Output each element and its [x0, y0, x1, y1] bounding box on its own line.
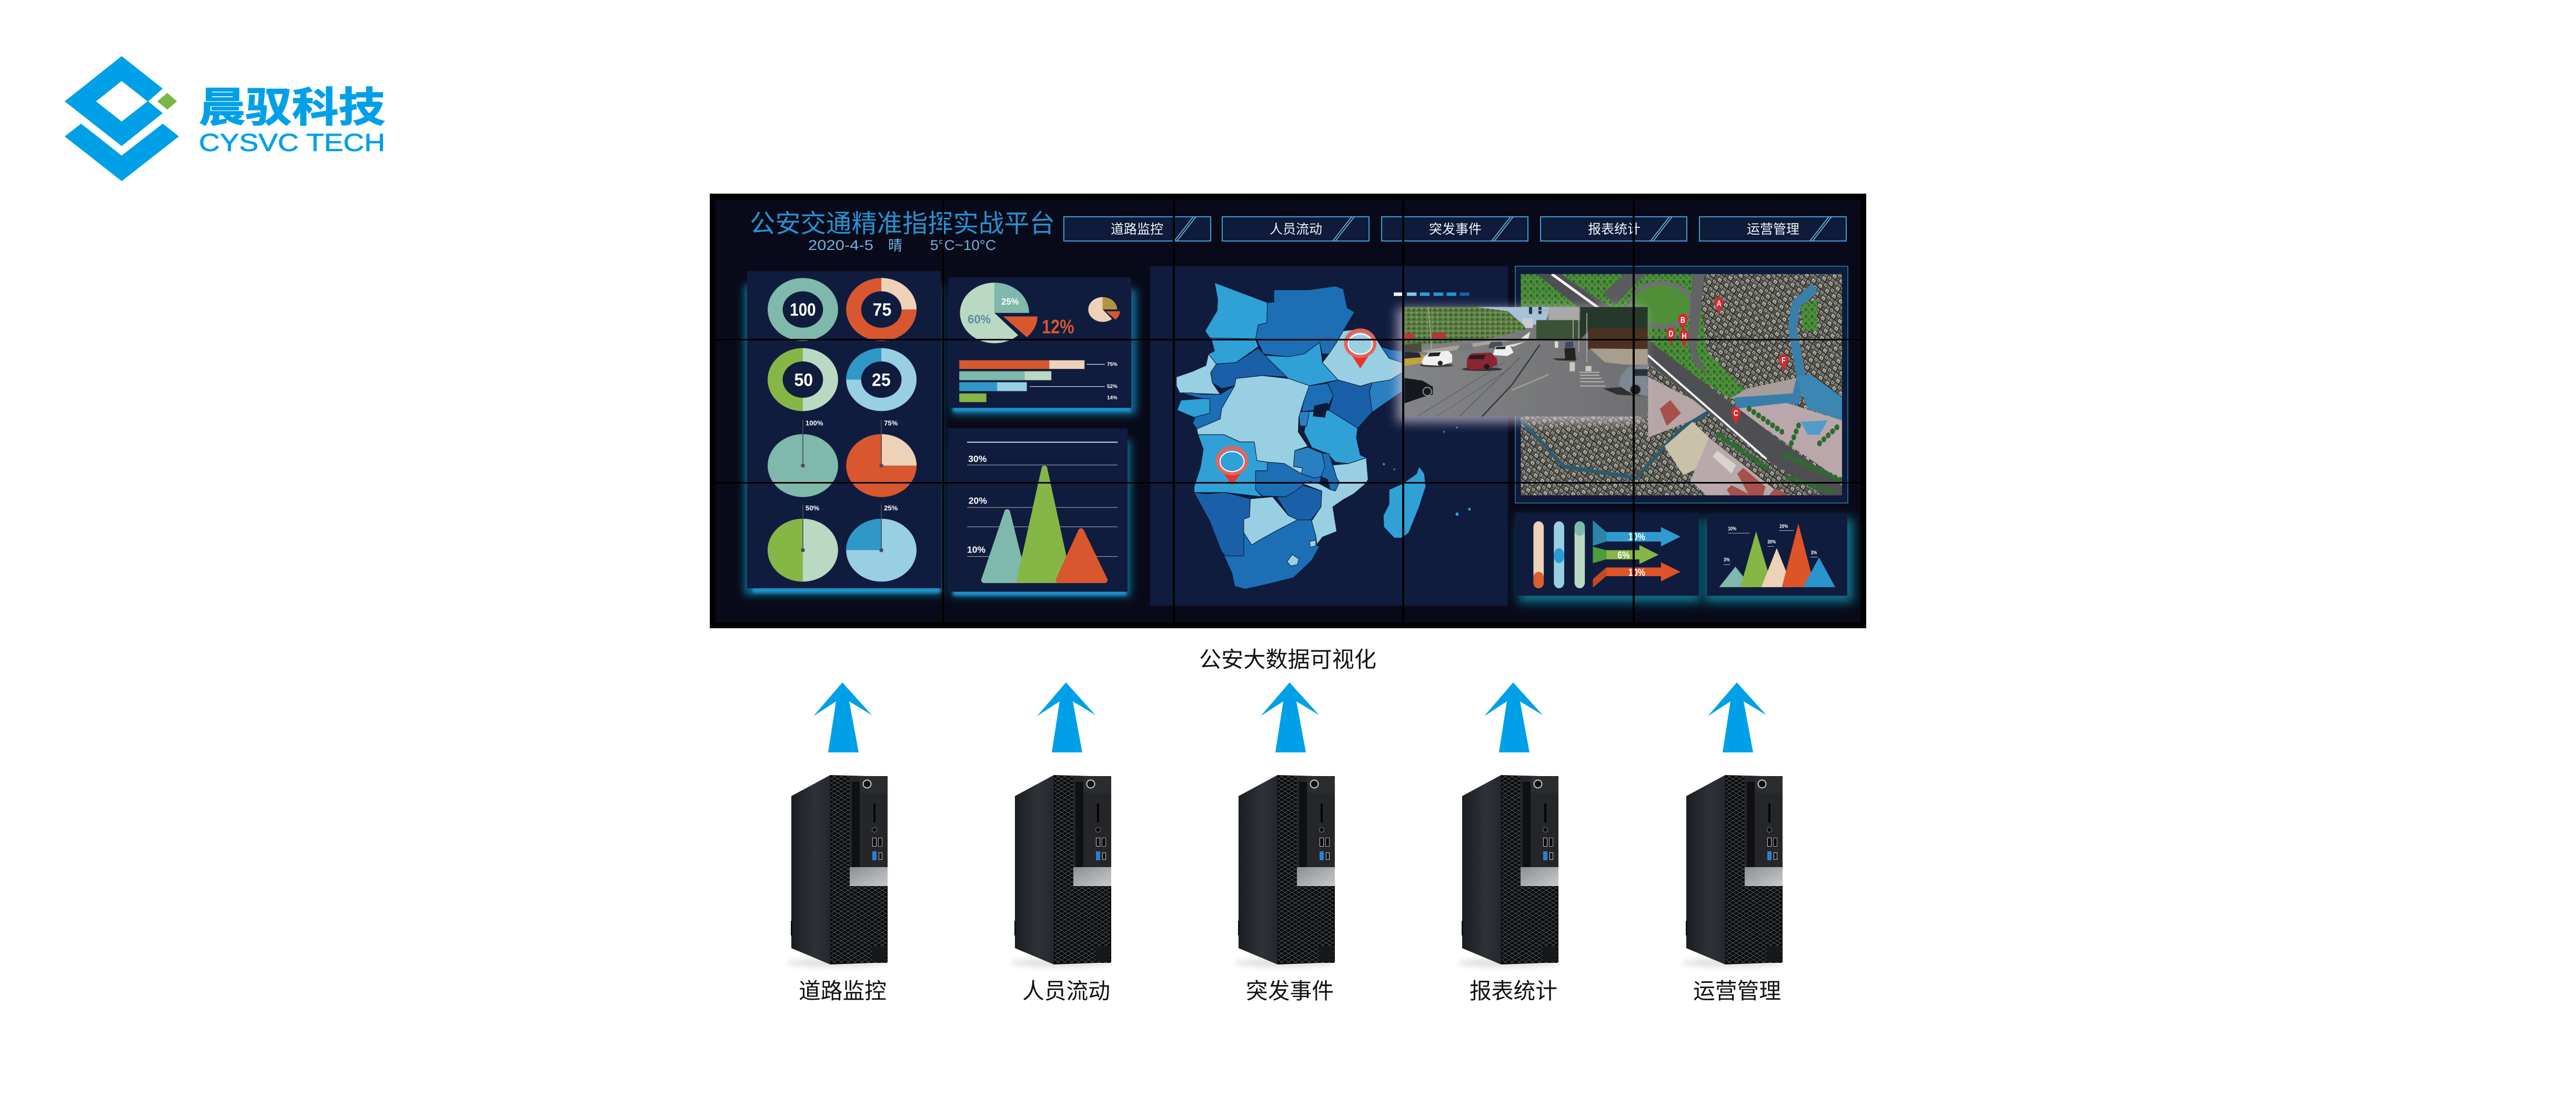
panel: pie and bar stats: [948, 277, 1131, 408]
label: report statistics: 报表统计: [1470, 979, 1557, 1003]
aerial city image: [1521, 274, 1842, 495]
computer 2: [1010, 775, 1111, 968]
pie 75: [846, 419, 917, 497]
aerial pins: C: [1734, 408, 1738, 418]
aerial pins: A: [1717, 299, 1722, 308]
donut 50: 50: [794, 370, 813, 390]
panel glows: [744, 285, 1136, 596]
small pie: [1088, 297, 1120, 322]
arrow 2: [1037, 682, 1095, 752]
pie 50: [768, 504, 838, 581]
choropleth map: [1176, 283, 1471, 589]
horizontal bars: 14%: [1107, 395, 1118, 401]
navigation tabs: 道路监控: [1111, 222, 1163, 237]
left chart panels: [744, 271, 1136, 596]
date and weather: 2020-4-5: [808, 237, 873, 253]
panel: triangle chart: 10%: [1728, 526, 1736, 531]
pie 25: 25%: [884, 504, 898, 512]
donut 100: [768, 278, 838, 341]
traffic signals and poles: [1428, 307, 1587, 362]
horizontal bars: 52%: [1107, 384, 1118, 389]
logo: [65, 56, 385, 181]
arrow 4: [1484, 682, 1543, 752]
aerial pins: B: [1681, 315, 1685, 325]
panel: triangle chart: 30%: [1767, 539, 1776, 545]
logo icon: [65, 56, 179, 181]
computer 3: [1234, 775, 1335, 968]
panel: africa map: [1150, 266, 1508, 606]
navigation tabs: [1064, 217, 1846, 241]
arrow 1: [813, 682, 872, 752]
date and weather: [808, 237, 996, 254]
date and weather: 晴: [888, 238, 902, 254]
large exploded pie: 60%: [968, 313, 991, 326]
panel: traffic video: [1397, 307, 1648, 423]
donut 75: 75: [873, 300, 891, 320]
panel: triangle chart: 20%: [1779, 524, 1788, 529]
computer 1: [787, 775, 888, 968]
panel: aerial map: [1515, 266, 1848, 503]
donut 100: 100: [790, 300, 816, 320]
aerial pins: H: [1682, 331, 1687, 340]
map pin 1: [1346, 330, 1375, 368]
panel: triangle chart: [1707, 514, 1847, 596]
aerial pins: [1666, 297, 1788, 425]
percent arrows: [1593, 520, 1681, 588]
percent arrows: 10%: [1628, 567, 1645, 578]
label: road monitoring: 道路监控: [799, 979, 887, 1003]
large exploded pie: 12%: [1042, 316, 1074, 338]
panel: gauges and arrows: [1515, 512, 1699, 596]
pie 100: [768, 419, 838, 497]
navigation tabs: 人员流动: [1270, 222, 1322, 237]
panel: donuts and pies: [747, 271, 941, 588]
skid marks and crosswalk: [1417, 345, 1606, 417]
percent arrows: 6%: [1617, 549, 1629, 561]
vertical gauges: [1533, 521, 1585, 588]
horizontal bars: 75%: [1107, 362, 1118, 368]
donut 50: [768, 348, 838, 411]
navigation tabs: 报表统计: [1588, 222, 1641, 237]
arrow 3: [1261, 682, 1319, 752]
donut 25: [846, 348, 917, 411]
platform title: 公安交通精准指挥实战平台: [750, 210, 1055, 238]
donut 25: 25: [872, 370, 891, 390]
video wall screen: [710, 194, 1866, 628]
panel: mountain chart: [948, 428, 1128, 592]
aerial pins: F: [1782, 356, 1786, 365]
large exploded pie: 25%: [1001, 296, 1019, 307]
percent arrows: 10%: [1628, 531, 1645, 542]
computer 4: [1457, 775, 1558, 968]
pie 75: 75%: [884, 419, 898, 427]
street background: [1404, 307, 1648, 365]
pie 50: 50%: [806, 504, 820, 512]
map pin 2: [1217, 448, 1246, 486]
pie 100: 100%: [806, 419, 823, 427]
logo chinese name: 晨驭科技: [199, 84, 385, 130]
logo english name: CYSVC TECH: [199, 128, 385, 156]
cars: [1404, 341, 1648, 404]
navigation tabs: 突发事件: [1429, 222, 1482, 237]
arrow 5: [1708, 682, 1766, 752]
panel: mountain chart: 10%: [967, 545, 986, 555]
legend bars: [1394, 293, 1470, 296]
navigation tabs: 运营管理: [1747, 222, 1799, 237]
donut 75: [846, 278, 917, 341]
date and weather: 5°C~10°C: [930, 237, 996, 253]
panel: mountain chart: 30%: [968, 454, 987, 464]
large exploded pie: [960, 283, 1074, 343]
panel: triangle chart: 3%: [1724, 557, 1730, 562]
label: personnel flow: 人员流动: [1022, 979, 1110, 1003]
panel glows bottom right: [1518, 518, 1853, 602]
horizontal bars: [959, 360, 1118, 402]
panel: triangle chart: 3%: [1811, 550, 1817, 555]
aerial pins: D: [1669, 329, 1674, 338]
pie 25: [846, 504, 917, 581]
label: operations management: 运营管理: [1693, 979, 1781, 1003]
caption: public security big data visualization: 公安大数据可视化: [1199, 647, 1376, 672]
computer 5: [1682, 775, 1783, 968]
panel: mountain chart: 20%: [969, 495, 987, 506]
label: emergencies: 突发事件: [1246, 979, 1334, 1003]
